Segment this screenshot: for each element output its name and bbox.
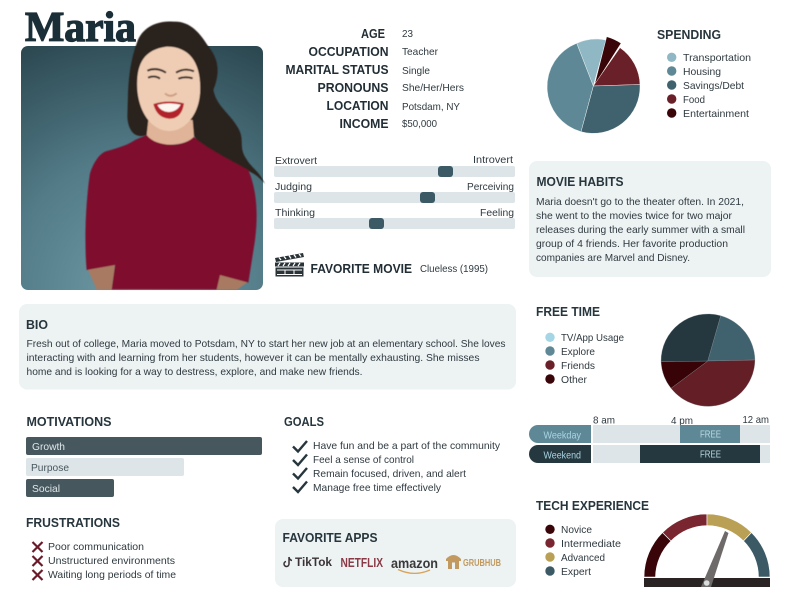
nose	[165, 93, 177, 96]
personality sliders: Feeling	[480, 207, 514, 219]
neck	[147, 120, 194, 145]
panel: movie habits: Maria doesn't go to the theater often. In 2021,	[536, 196, 744, 208]
logo: Amazon: amazon	[391, 556, 438, 571]
demographics: $50,000	[402, 118, 437, 130]
weekly schedule chart: Weekend	[544, 450, 581, 462]
panel: bio: Fresh out of college, Maria moved to Potsdam, NY to start her new job at an elementary school. She loves	[26, 338, 506, 350]
face	[137, 47, 200, 131]
logo: TikTok: TikTok	[295, 555, 332, 569]
demographics: AGE	[361, 27, 385, 41]
goals: Manage free time effectively	[313, 482, 442, 494]
logo: Grubhub: GRUBHUB	[463, 558, 501, 569]
demographics: OCCUPATION	[308, 45, 388, 59]
logo: Netflix: NETFLIX	[340, 555, 383, 570]
panel: movie habits: group of 4 friends. Her favorite production	[536, 238, 728, 250]
favorite movie	[310, 262, 488, 276]
panel: movie habits: she went to the movies twice for two major	[536, 210, 732, 222]
panel: free time: FREE TIME	[536, 305, 600, 319]
frustrations	[26, 516, 176, 581]
frustrations: FRUSTRATIONS	[26, 516, 120, 530]
motivations: Purpose	[31, 462, 69, 474]
spending legend: Savings/Debt	[683, 80, 744, 92]
panel: movie habits: companies are Marvel and Disney.	[536, 252, 690, 264]
motivations: Social	[32, 483, 60, 495]
demographics: Teacher	[402, 46, 438, 58]
spending legend: SPENDING	[657, 28, 721, 42]
panel: bio: interacting with and learning from her students, however it can be mentally exhausting. She misses	[26, 352, 480, 364]
title: Maria	[25, 5, 136, 51]
tech experience legend: Intermediate	[561, 538, 621, 550]
tech experience legend: Expert	[561, 566, 591, 578]
favorite movie: FAVORITE MOVIE	[310, 262, 412, 276]
demographics	[286, 27, 464, 131]
personality sliders: Extrovert	[275, 155, 317, 167]
panel: free time: Other	[561, 374, 587, 386]
motivations	[26, 415, 262, 497]
personality sliders: Introvert	[473, 154, 513, 166]
weekly schedule chart: 4 pm	[671, 415, 693, 427]
tech experience legend	[536, 499, 649, 578]
demographics: MARITAL STATUS	[286, 63, 388, 77]
personality sliders: Perceiving	[467, 181, 514, 193]
dress	[85, 135, 257, 289]
goals: Remain focused, driven, and alert	[313, 468, 466, 480]
frustrations: Waiting long periods of time	[48, 569, 176, 581]
panel: bio: BIO	[26, 318, 48, 332]
spending legend	[657, 28, 751, 120]
weekly schedule chart: FREE	[700, 428, 721, 440]
panel: free time	[536, 305, 624, 386]
demographics: LOCATION	[326, 99, 388, 113]
goals: GOALS	[284, 415, 324, 429]
favorite movie: Clueless (1995)	[420, 263, 488, 275]
weekly schedule chart: FREE	[700, 448, 721, 460]
right eye and brow	[176, 70, 194, 79]
gauge: tech experience	[644, 514, 770, 587]
frustrations: Poor communication	[48, 541, 144, 553]
spending legend: Entertainment	[683, 108, 749, 120]
demographics: Potsdam, NY	[402, 101, 460, 113]
panel: movie habits: releases during the early summer with a small	[536, 224, 745, 236]
panel: favorite apps: FAVORITE APPS	[282, 531, 378, 545]
panel: movie habits	[529, 161, 771, 277]
goals	[284, 415, 501, 494]
panel: free time: TV/App Usage	[561, 332, 624, 344]
spending legend: Food	[683, 94, 705, 106]
demographics: 23	[402, 28, 413, 40]
logo: Grubhub	[446, 555, 501, 569]
pie chart: spending	[547, 37, 640, 133]
personality sliders	[274, 154, 515, 229]
hair	[127, 21, 265, 184]
motivations: Growth	[32, 441, 65, 453]
panel: free time: Friends	[561, 360, 595, 372]
teeth	[157, 103, 181, 112]
demographics: PRONOUNS	[318, 81, 388, 95]
goals: Feel a sense of control	[313, 454, 414, 466]
spending legend: Transportation	[683, 52, 751, 64]
panel: bio: home and is looking for a way to destress, explore, and make new friends.	[26, 366, 362, 378]
photo: Maria smiling portrait	[21, 21, 265, 290]
demographics: Single	[402, 65, 430, 77]
lips	[153, 101, 184, 119]
arms	[87, 263, 248, 289]
panel: bio	[19, 304, 516, 390]
left eye and brow	[147, 69, 166, 79]
motivations: MOTIVATIONS	[26, 415, 112, 429]
weekly schedule chart: 8 am	[593, 414, 615, 426]
goals: Have fun and be a part of the community	[313, 440, 501, 452]
personality sliders: Judging	[275, 181, 312, 193]
panel: favorite apps	[275, 519, 516, 587]
frustrations: Unstructured environments	[48, 555, 175, 567]
demographics: She/Her/Hers	[402, 82, 464, 94]
personality sliders: Thinking	[275, 207, 315, 219]
panel: movie habits: MOVIE HABITS	[536, 175, 624, 189]
weekly schedule chart: Weekday	[544, 430, 582, 442]
tech experience legend: Novice	[561, 524, 592, 536]
panel: free time: Explore	[561, 346, 595, 358]
weekly schedule chart	[529, 414, 770, 463]
icon: clapperboard	[275, 253, 304, 276]
demographics: INCOME	[340, 117, 388, 131]
spending legend: Housing	[683, 66, 721, 78]
tech experience legend: Advanced	[561, 552, 605, 564]
weekly schedule chart: 12 am	[742, 414, 769, 426]
pie chart: free time	[661, 314, 755, 406]
tech experience legend: TECH EXPERIENCE	[536, 499, 649, 513]
